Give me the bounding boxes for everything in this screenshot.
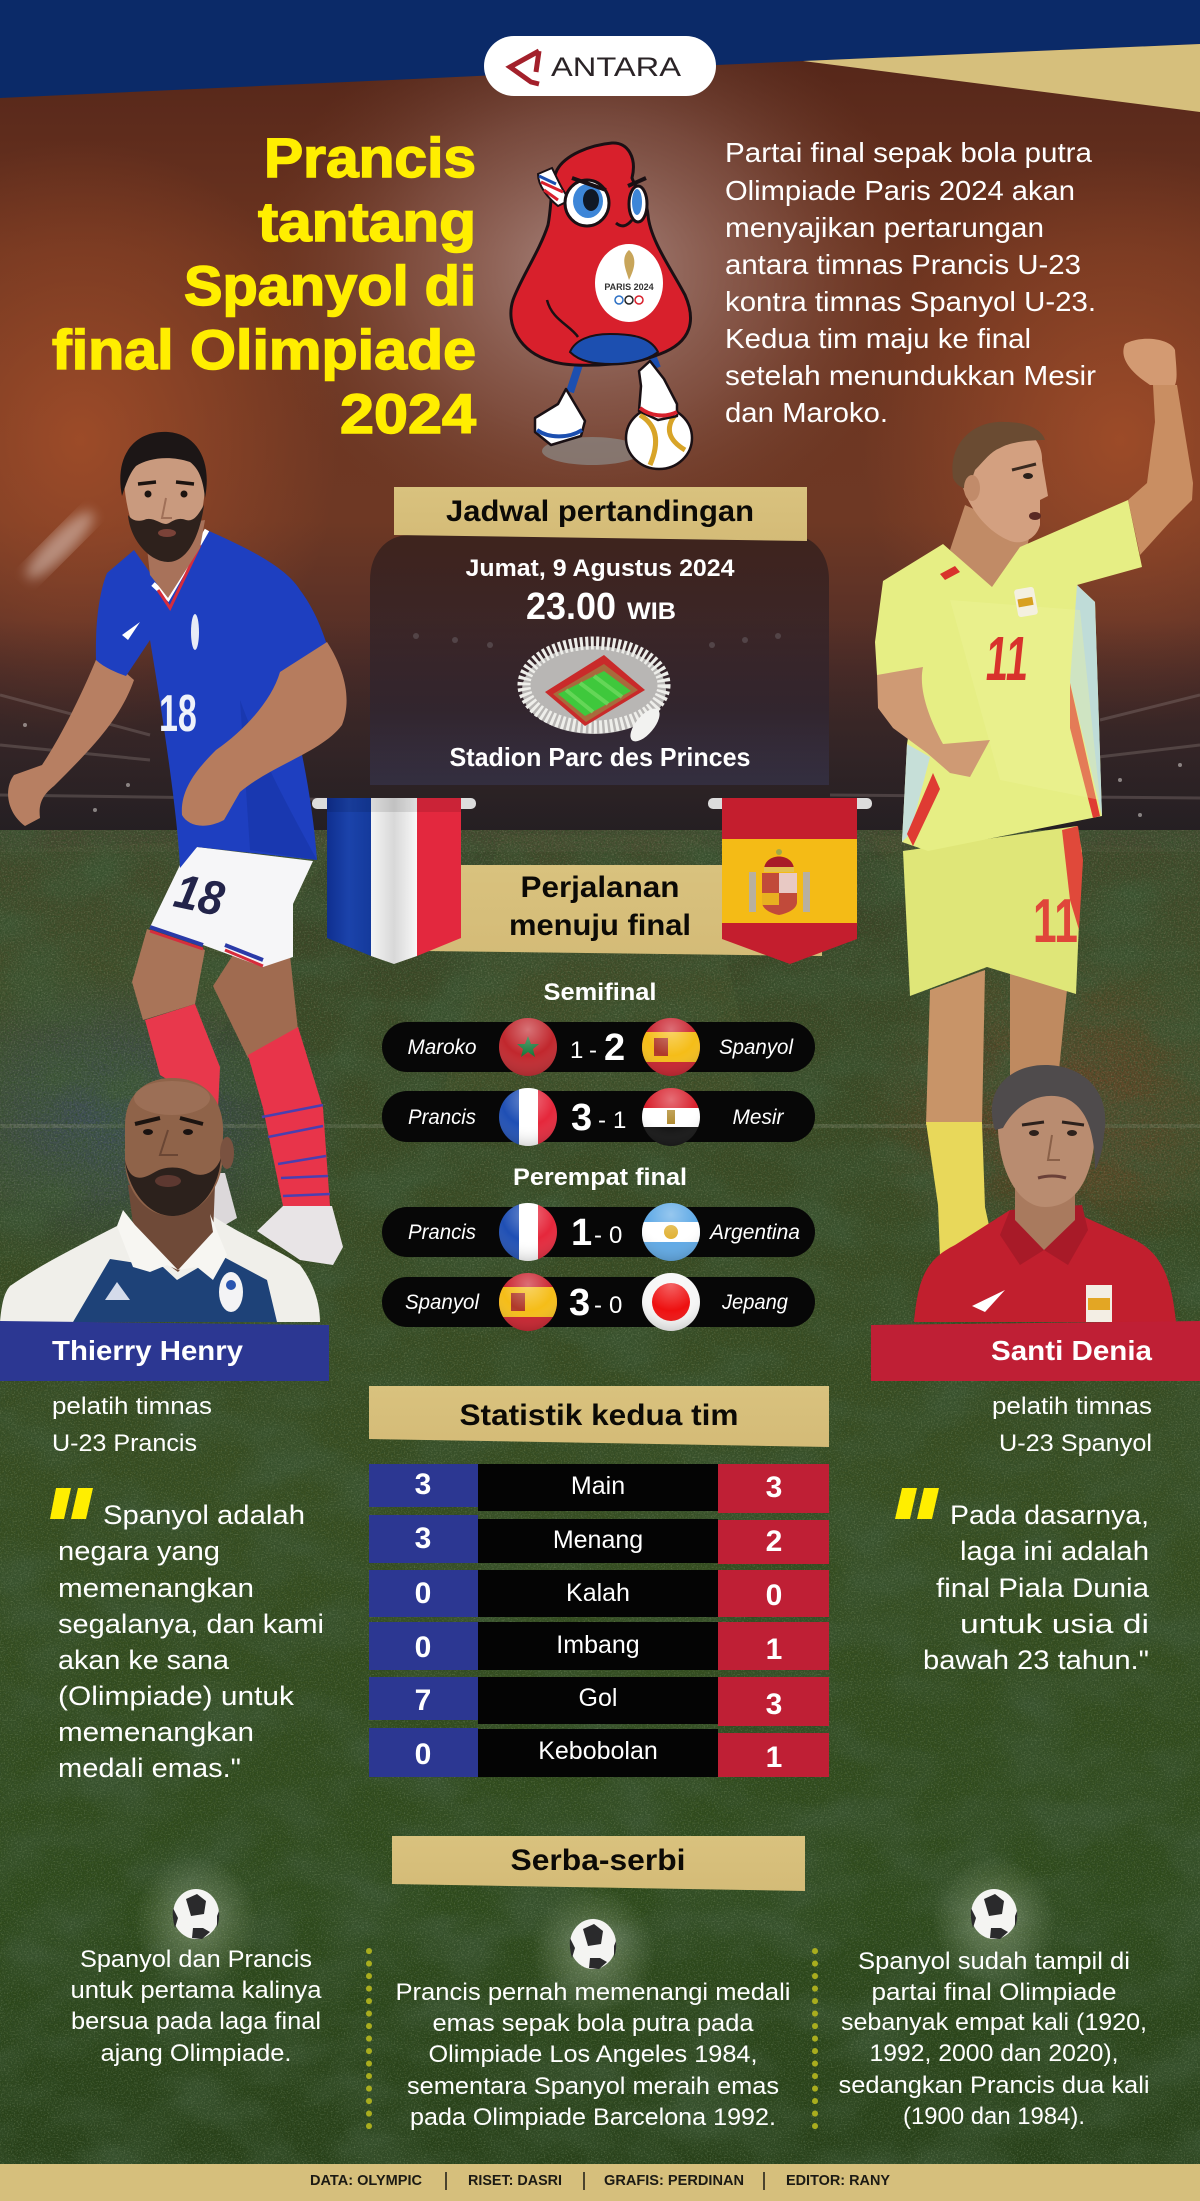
icon: quote mark left bbox=[50, 1488, 93, 1519]
match date and time: 23.00 bbox=[526, 586, 616, 628]
icon: Phryge mascot bbox=[511, 143, 692, 469]
quote: Henry: memenangkan bbox=[58, 1573, 254, 1603]
heading: Statistik kedua tim: Statistik kedua tim bbox=[460, 1399, 738, 1432]
heading: Serba-serbi: Serba-serbi bbox=[510, 1844, 686, 1877]
quote: Denia: Pada dasarnya, bbox=[950, 1500, 1149, 1530]
quote: Denia: final Piala Dunia bbox=[936, 1573, 1150, 1603]
match: Prancis vs Argentina bbox=[382, 1203, 815, 1261]
title bbox=[52, 126, 476, 445]
match: Maroko vs Spanyol: Spanyol bbox=[719, 1036, 794, 1059]
heading: Perjalanan menuju final: menuju final bbox=[509, 909, 691, 942]
stat row: Menang bbox=[369, 1515, 829, 1564]
coach role: Denia bbox=[992, 1393, 1152, 1457]
intro paragraph: dan Maroko. bbox=[725, 397, 888, 428]
icon: Phryge mascot: PARIS 2024 bbox=[604, 282, 654, 292]
stat row: Kalah: 0 bbox=[415, 1577, 431, 1610]
heading: Jadwal pertandingan bbox=[394, 487, 807, 541]
fact 1: bersua pada laga final bbox=[71, 2008, 321, 2035]
match: Prancis vs Mesir: Prancis bbox=[408, 1106, 476, 1129]
French player figure bbox=[8, 432, 347, 1265]
fact 2: sementara Spanyol meraih emas bbox=[407, 2073, 779, 2100]
heading: Perjalanan menuju final bbox=[425, 865, 822, 956]
coach role: Denia: pelatih timnas bbox=[992, 1393, 1152, 1420]
fact 1: Spanyol dan Prancis bbox=[80, 1946, 312, 1973]
stat row: Gol: Gol bbox=[579, 1684, 617, 1712]
footer credits bar: RISET: DASRI bbox=[468, 2172, 562, 2189]
fact 1 bbox=[70, 1946, 322, 2067]
heading: Semifinal: Semifinal bbox=[544, 979, 656, 1006]
match: Spanyol vs Jepang: Spanyol bbox=[405, 1291, 480, 1314]
footer credits bar bbox=[0, 2164, 1200, 2201]
fact 2: pada Olimpiade Barcelona 1992. bbox=[410, 2104, 776, 2131]
coach name banner: Thierry Henry: Thierry Henry bbox=[52, 1335, 243, 1366]
fact 2: emas sepak bola putra pada bbox=[432, 2010, 754, 2037]
stat row: Imbang: 1 bbox=[766, 1633, 782, 1666]
stat row: Main bbox=[369, 1464, 829, 1513]
intro paragraph: Olimpiade Paris 2024 akan bbox=[725, 175, 1075, 206]
stat row: Kebobolan: Kebobolan bbox=[538, 1737, 658, 1765]
match: Spanyol vs Jepang: 0 bbox=[609, 1292, 622, 1319]
Spanish player figure: 11 bbox=[983, 624, 1032, 694]
stat row: Gol: 7 bbox=[415, 1684, 431, 1717]
match: Prancis vs Mesir: - bbox=[598, 1107, 606, 1134]
match: Prancis vs Argentina: 1 bbox=[571, 1212, 592, 1254]
intro paragraph: Partai final sepak bola putra bbox=[725, 137, 1092, 168]
stat row: Gol bbox=[369, 1677, 829, 1726]
Spanish player figure: 11 bbox=[1033, 887, 1078, 956]
fact 3: sebanyak empat kali (1920, bbox=[841, 2009, 1147, 2036]
coach name banner: Thierry Henry bbox=[0, 1321, 329, 1381]
icon: football 3 bbox=[932, 1856, 1056, 1988]
title: Spanyol di bbox=[184, 254, 476, 317]
French player figure: 18 bbox=[159, 685, 197, 743]
stats table bbox=[369, 1464, 829, 1777]
ANTARA logo pill: ANTARA bbox=[551, 52, 681, 82]
stat row: Main: 3 bbox=[766, 1471, 782, 1504]
match: Prancis vs Mesir bbox=[382, 1088, 815, 1146]
icon: quote mark right bbox=[895, 1488, 939, 1519]
title: tantang bbox=[258, 190, 476, 253]
quote: Henry: medali emas." bbox=[58, 1753, 241, 1783]
match: Spanyol vs Jepang: 3 bbox=[569, 1282, 590, 1324]
fact 3: (1900 dan 1984). bbox=[903, 2103, 1085, 2130]
stat row: Kalah: Kalah bbox=[566, 1579, 630, 1607]
heading: Perempat final: Perempat final bbox=[513, 1164, 687, 1191]
icon: football 2 bbox=[531, 1886, 655, 2018]
quote: Henry: segalanya, dan kami bbox=[58, 1609, 324, 1639]
match: Maroko vs Spanyol: - bbox=[589, 1037, 597, 1064]
match: Prancis vs Argentina: Prancis bbox=[408, 1221, 476, 1244]
stat row: Kebobolan: 1 bbox=[766, 1741, 782, 1774]
quote: Denia bbox=[923, 1500, 1150, 1675]
match: Prancis vs Mesir: Mesir bbox=[732, 1106, 784, 1129]
stat row: Kebobolan bbox=[369, 1728, 829, 1777]
coach role: Henry bbox=[52, 1393, 212, 1457]
fact 2: Prancis pernah memenangi medali bbox=[396, 1979, 790, 2006]
Denia portrait bbox=[914, 1065, 1176, 1322]
match: Maroko vs Spanyol: Maroko bbox=[408, 1036, 477, 1059]
intro paragraph: menyajikan pertarungan bbox=[725, 212, 1044, 243]
ANTARA logo pill bbox=[484, 36, 716, 96]
top navy band bbox=[0, 0, 1200, 98]
stat row: Main: 3 bbox=[415, 1468, 431, 1501]
intro paragraph: setelah menundukkan Mesir bbox=[725, 360, 1096, 391]
coach role: Henry: U-23 Prancis bbox=[52, 1430, 197, 1457]
intro paragraph: kontra timnas Spanyol U-23. bbox=[725, 286, 1096, 317]
Spanish player figure bbox=[875, 339, 1193, 1256]
stat row: Imbang bbox=[369, 1622, 829, 1670]
fact 3: sedangkan Prancis dua kali bbox=[838, 2072, 1150, 2099]
match: Prancis vs Mesir: 3 bbox=[571, 1097, 592, 1139]
match: Spanyol vs Jepang: Jepang bbox=[721, 1291, 788, 1314]
title: final Olimpiade bbox=[52, 318, 476, 381]
gold corner accent bbox=[803, 44, 1200, 112]
quote: Denia: untuk usia di bbox=[960, 1609, 1149, 1639]
stat row: Imbang: 0 bbox=[415, 1631, 431, 1664]
quote: Henry: memenangkan bbox=[58, 1717, 254, 1747]
stat row: Menang: 2 bbox=[766, 1525, 782, 1558]
heading: Serba-serbi bbox=[392, 1836, 805, 1891]
fact 2: Olimpiade Los Angeles 1984, bbox=[428, 2041, 758, 2068]
match: Prancis vs Argentina: - bbox=[594, 1222, 602, 1249]
stat row: Kalah: 0 bbox=[766, 1579, 782, 1612]
match: Maroko vs Spanyol: 1 bbox=[570, 1037, 583, 1064]
schedule panel background bbox=[370, 535, 829, 785]
heading: Jadwal pertandingan: Jadwal pertandingan bbox=[446, 495, 754, 528]
footer credits bar: GRAFIS: PERDINAN bbox=[604, 2172, 744, 2189]
coach role: Henry: pelatih timnas bbox=[52, 1393, 212, 1420]
fact 1: untuk pertama kalinya bbox=[70, 1977, 322, 2004]
quote: Henry: akan ke sana bbox=[58, 1645, 230, 1675]
fact 3: Spanyol sudah tampil di bbox=[858, 1948, 1130, 1975]
intro paragraph: antara timnas Prancis U-23 bbox=[725, 249, 1081, 280]
match: Maroko vs Spanyol: 2 bbox=[604, 1027, 625, 1069]
match: Spanyol vs Jepang bbox=[382, 1273, 815, 1331]
coach role: Denia: U-23 Spanyol bbox=[999, 1430, 1152, 1457]
fact 2 bbox=[396, 1979, 790, 2131]
stat row: Menang: Menang bbox=[553, 1526, 643, 1554]
quote: Henry bbox=[58, 1500, 324, 1783]
Spain pennant flag bbox=[708, 798, 872, 964]
venue name: Stadion Parc des Princes bbox=[450, 742, 750, 772]
quote: Denia: laga ini adalah bbox=[960, 1536, 1149, 1566]
intro paragraph bbox=[725, 137, 1096, 428]
match: Prancis vs Mesir: 1 bbox=[613, 1107, 626, 1134]
intro paragraph: Kedua tim maju ke final bbox=[725, 323, 1031, 354]
quote: Henry: (Olimpiade) untuk bbox=[58, 1681, 295, 1711]
stat row: Kebobolan: 0 bbox=[415, 1738, 431, 1771]
quote: Henry: negara yang bbox=[58, 1536, 220, 1566]
quote: Henry: Spanyol adalah bbox=[103, 1500, 305, 1530]
title: Prancis bbox=[264, 126, 476, 189]
stat row: Gol: 3 bbox=[766, 1688, 782, 1721]
match: Spanyol vs Jepang: - bbox=[594, 1292, 602, 1319]
match: Prancis vs Argentina: 0 bbox=[609, 1222, 622, 1249]
heading: Perjalanan menuju final: Perjalanan bbox=[520, 871, 680, 904]
match: Maroko vs Spanyol bbox=[382, 1018, 815, 1076]
footer credits bar: DATA: OLYMPIC bbox=[310, 2172, 422, 2189]
fact 3 bbox=[838, 1948, 1150, 2130]
stat row: Imbang: Imbang bbox=[556, 1631, 640, 1659]
match: Prancis vs Argentina: Argentina bbox=[708, 1221, 800, 1244]
fact 3: 1992, 2000 dan 2020), bbox=[870, 2040, 1118, 2067]
icon: football 1 bbox=[134, 1856, 258, 1988]
stat row: Main: Main bbox=[571, 1472, 625, 1500]
fact 3: partai final Olimpiade bbox=[872, 1979, 1116, 2006]
icon: stadium Parc des Princes bbox=[522, 643, 666, 746]
coach name banner: Santi Denia bbox=[871, 1321, 1200, 1381]
match date and time bbox=[466, 555, 735, 628]
title: 2024 bbox=[340, 382, 476, 445]
coach name banner: Santi Denia: Santi Denia bbox=[991, 1335, 1152, 1366]
stat row: Kalah bbox=[369, 1570, 829, 1617]
match date and time: WIB bbox=[627, 598, 676, 625]
quote: Denia: bawah 23 tahun." bbox=[923, 1645, 1149, 1675]
French player figure: 18 bbox=[170, 863, 229, 926]
match date and time: Jumat, 9 Agustus 2024 bbox=[466, 555, 735, 582]
footer credits bar: EDITOR: RANY bbox=[786, 2172, 890, 2189]
fact 1: ajang Olimpiade. bbox=[100, 2040, 292, 2067]
heading: Statistik kedua tim bbox=[369, 1386, 829, 1447]
France pennant flag bbox=[312, 798, 476, 964]
Henry portrait bbox=[0, 1078, 320, 1322]
stat row: Menang: 3 bbox=[415, 1522, 431, 1555]
